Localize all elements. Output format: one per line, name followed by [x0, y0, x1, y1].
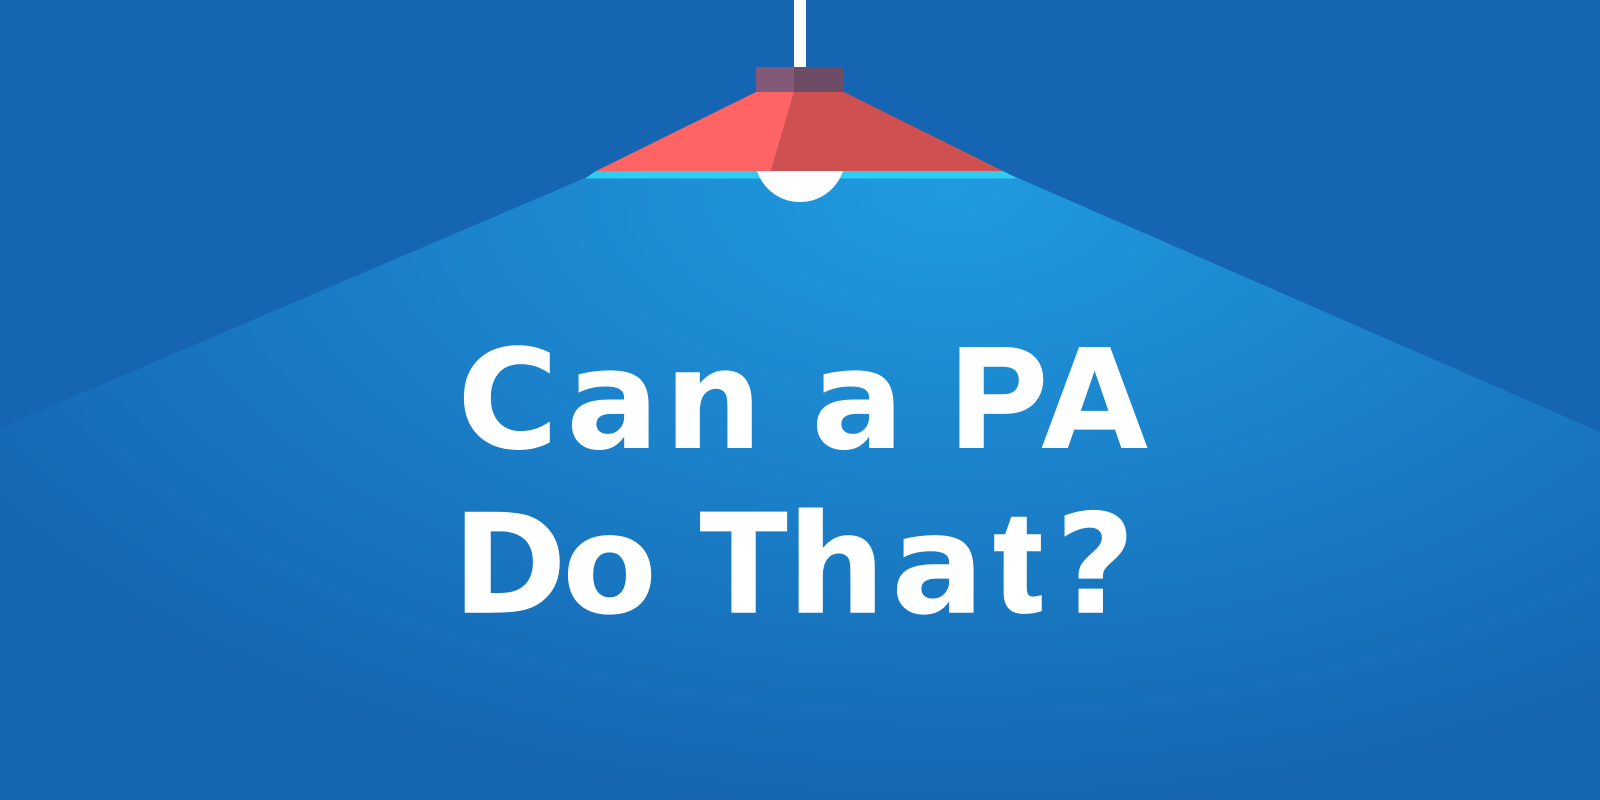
lamp light band — [585, 171, 1018, 178]
lamp cap — [756, 67, 844, 92]
light beam — [0, 178, 1600, 800]
title line 2: Do — [452, 484, 657, 646]
title line 2: t — [994, 483, 1041, 641]
title line 2: T — [700, 483, 787, 641]
lamp cord — [794, 0, 806, 68]
lamp shade — [596, 92, 1003, 171]
title line 2: ha — [787, 484, 984, 646]
light bulb — [757, 171, 843, 202]
title line 1: Can a — [457, 319, 904, 481]
title line 1: P — [952, 318, 1046, 476]
title line 1: A — [1041, 319, 1148, 481]
icon: ceiling lamp — [585, 0, 1018, 202]
title — [452, 318, 1148, 646]
title line 2: ? — [1055, 484, 1135, 646]
